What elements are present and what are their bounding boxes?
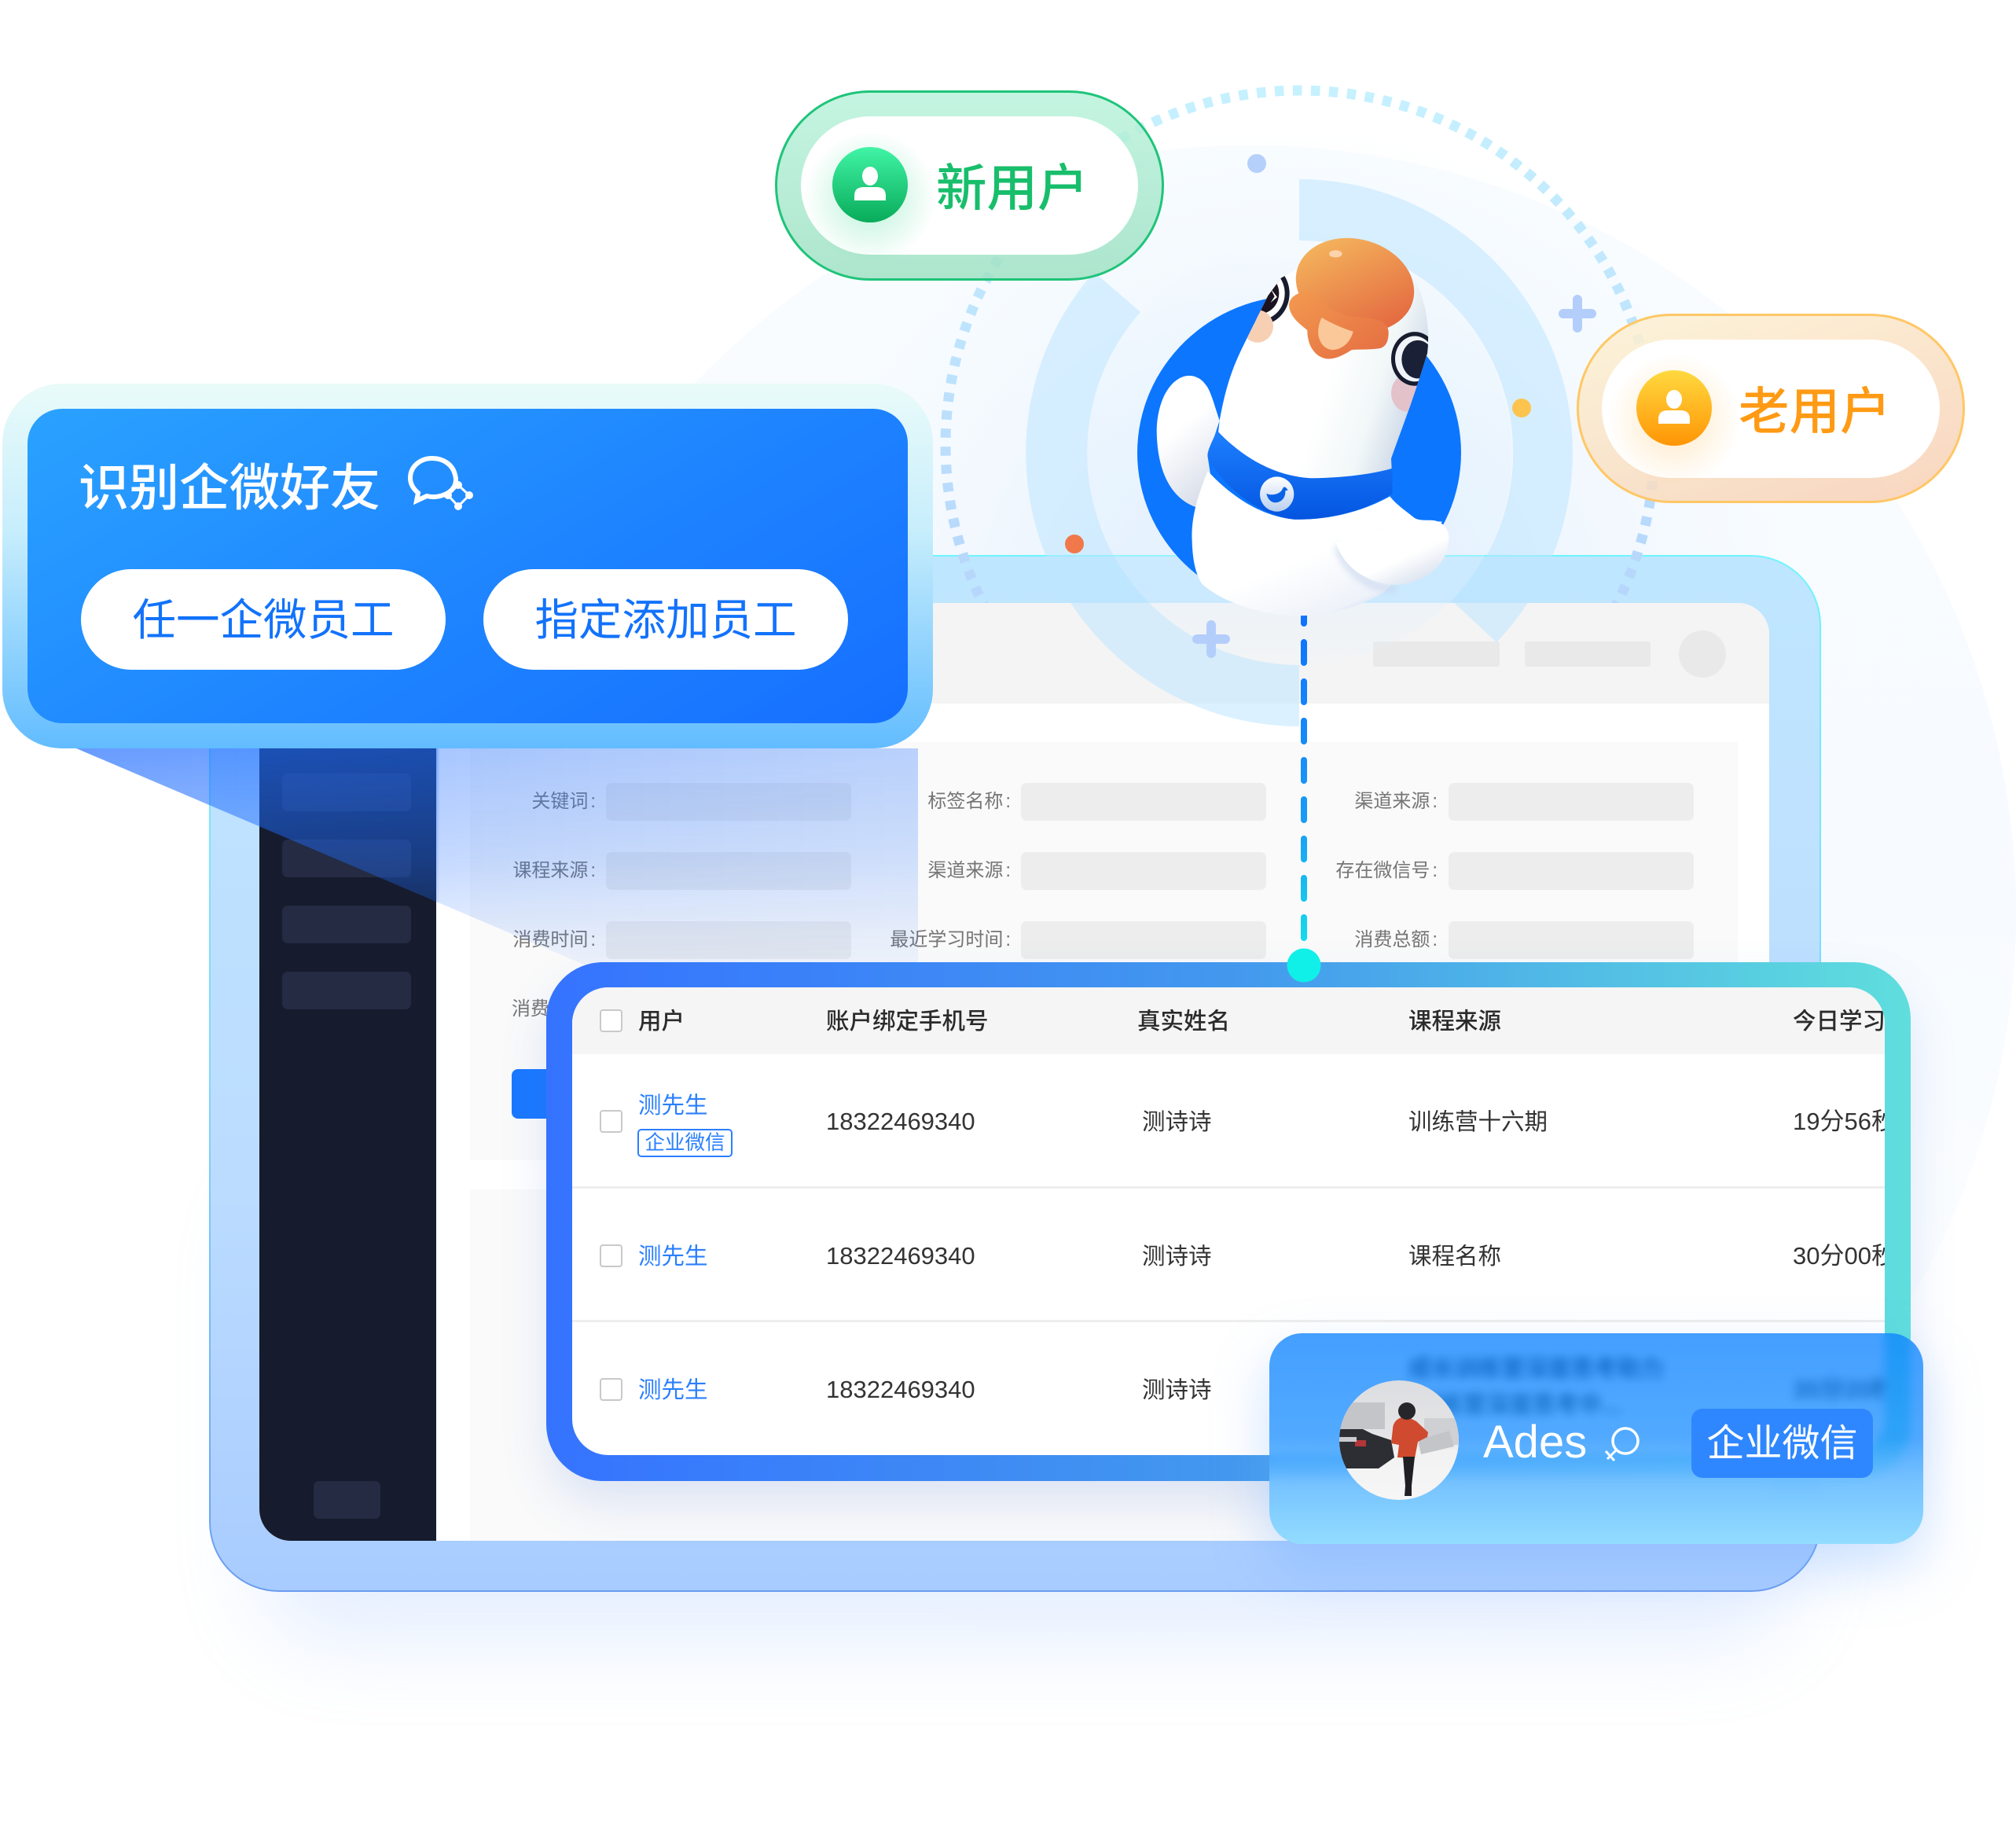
row divider 2 bbox=[572, 1320, 1885, 1322]
row 3 course line 1: 成长训练营深度思考助力 bbox=[1408, 1356, 1664, 1382]
blue circle backdrop bbox=[1137, 296, 1461, 610]
panel: admin app window bbox=[259, 603, 1769, 1541]
label: keyword: 关键词: bbox=[531, 791, 596, 812]
icon: orange user bbox=[1618, 363, 1731, 478]
label: spend cut off: 消费 bbox=[512, 998, 549, 1020]
row 2 user: 测先生 bbox=[638, 1244, 708, 1270]
input bbox=[1021, 921, 1266, 959]
button: wecom bbox=[1691, 1409, 1873, 1478]
row divider 1 bbox=[572, 1186, 1885, 1189]
header: phone: 账户绑定手机号 bbox=[826, 1009, 989, 1035]
header: real name: 真实姓名 bbox=[1137, 1009, 1230, 1035]
button: any wecom employee bbox=[81, 569, 446, 670]
hat bbox=[1287, 226, 1423, 344]
button: designated employee: 指定添加员工 bbox=[534, 596, 797, 645]
panel: identify wecom friends bbox=[2, 384, 933, 748]
row 2 phone: 18322469340 bbox=[826, 1242, 975, 1270]
pill: existing user bbox=[1577, 314, 1965, 503]
row 3 phone: 18322469340 bbox=[826, 1376, 975, 1403]
input bbox=[606, 921, 851, 959]
text: new user: 新用户 bbox=[936, 160, 1089, 217]
row 3 user: 测先生 bbox=[638, 1377, 708, 1403]
row 1 phone: 18322469340 bbox=[826, 1108, 975, 1135]
input bbox=[1021, 852, 1266, 890]
row 1 wecom tag bbox=[637, 1129, 733, 1157]
panel: user table bbox=[546, 962, 1911, 1481]
row 3 name: 测诗诗 bbox=[1142, 1377, 1212, 1403]
table body bbox=[572, 987, 1885, 1455]
input bbox=[1449, 921, 1694, 959]
left flipper bbox=[1157, 376, 1220, 508]
row 1 name: 测诗诗 bbox=[1142, 1109, 1212, 1135]
sidebar item 3 bbox=[282, 906, 411, 943]
upper body bbox=[1216, 267, 1428, 502]
button: wecom: 企业微信 bbox=[1706, 1423, 1858, 1465]
decorative dot: blue bbox=[1247, 154, 1266, 173]
lower body bbox=[1192, 471, 1442, 616]
pill inner white bbox=[1602, 340, 1940, 478]
header: user: 用户 bbox=[638, 1009, 685, 1035]
label: course source: 课程来源: bbox=[512, 860, 596, 881]
input bbox=[1449, 852, 1694, 890]
label: total spend: 消费总额: bbox=[1354, 929, 1438, 950]
input bbox=[1021, 783, 1266, 821]
label: spend time: 消费时间: bbox=[512, 929, 596, 950]
row 1 checkbox bbox=[600, 1110, 622, 1133]
avatar photo bbox=[1339, 1380, 1459, 1500]
icon: magnifier gender mark bbox=[1605, 1427, 1640, 1461]
icon: green user bbox=[812, 139, 929, 255]
header placeholder 2 bbox=[1525, 641, 1651, 667]
decorative dot: orange bbox=[1065, 535, 1084, 553]
name: Ades: Ades bbox=[1483, 1417, 1587, 1468]
eyes and cheeks bbox=[1247, 276, 1429, 412]
header avatar placeholder bbox=[1679, 630, 1726, 678]
icon: plus bottom left bbox=[1192, 620, 1230, 658]
list panel background bbox=[470, 1189, 1769, 1541]
table header row bbox=[572, 987, 1885, 1054]
cone of light from card to table bbox=[76, 748, 918, 965]
sidebar bbox=[259, 603, 436, 1541]
label: channel: 渠道来源: bbox=[1354, 791, 1438, 812]
row 2 checkbox bbox=[600, 1244, 622, 1267]
card inner blue bbox=[28, 409, 908, 723]
row 3 checkbox bbox=[600, 1378, 622, 1401]
label: channel source: 渠道来源: bbox=[927, 860, 1011, 881]
connector node dot bbox=[1287, 948, 1320, 983]
card: wecom contact bbox=[1269, 1333, 1923, 1544]
input bbox=[606, 852, 851, 890]
pill: new user bbox=[775, 90, 1164, 281]
tongue bbox=[1318, 318, 1353, 350]
illustration: duck mascot bbox=[1137, 237, 1461, 616]
sidebar footer item bbox=[314, 1481, 380, 1519]
app header bar bbox=[259, 603, 1769, 704]
sidebar item 2 bbox=[282, 840, 411, 877]
collar badge bbox=[1260, 476, 1294, 512]
sidebar item 1 bbox=[282, 774, 411, 811]
filter form background bbox=[470, 742, 1738, 1160]
pill inner white bbox=[801, 116, 1138, 255]
input bbox=[1449, 783, 1694, 821]
label: wechat exists: 存在微信号: bbox=[1335, 860, 1438, 881]
flipper shadow bbox=[1338, 546, 1397, 589]
input bbox=[606, 783, 851, 821]
label: tag name: 标签名称: bbox=[927, 791, 1011, 812]
row 1 user: 测先生 bbox=[638, 1093, 708, 1119]
icon: wecom chat bubble bbox=[408, 456, 473, 510]
button: designated employee bbox=[483, 569, 848, 670]
text: existing user: 老用户 bbox=[1739, 384, 1891, 440]
button: any wecom employee: 任一企微员工 bbox=[132, 596, 395, 645]
decorative dot: yellow bbox=[1512, 399, 1531, 417]
header: course source: 课程来源 bbox=[1408, 1009, 1501, 1035]
icon: plus top right bbox=[1559, 295, 1596, 333]
beak bbox=[1289, 292, 1389, 358]
row 2 name: 测诗诗 bbox=[1142, 1244, 1212, 1270]
right flipper bbox=[1336, 516, 1449, 585]
label: recent study: 最近学习时间: bbox=[890, 929, 1011, 950]
heading: identify wecom friends: 识别企微好友 bbox=[79, 460, 380, 516]
header: today study: 今日学习 bbox=[1793, 1009, 1885, 1035]
row 2 course: 课程名称 bbox=[1408, 1244, 1501, 1270]
header placeholder 1 bbox=[1373, 641, 1500, 667]
row 1 course: 训练营十六期 bbox=[1408, 1109, 1548, 1135]
row 3 course line 2: (训练营深度思考中... bbox=[1408, 1392, 1621, 1418]
search button bbox=[512, 1069, 582, 1119]
collar bbox=[1207, 430, 1393, 520]
header checkbox bbox=[600, 1009, 622, 1032]
row 1 wecom tag: 企业微信 bbox=[644, 1132, 725, 1154]
sidebar item 4 bbox=[282, 972, 411, 1009]
